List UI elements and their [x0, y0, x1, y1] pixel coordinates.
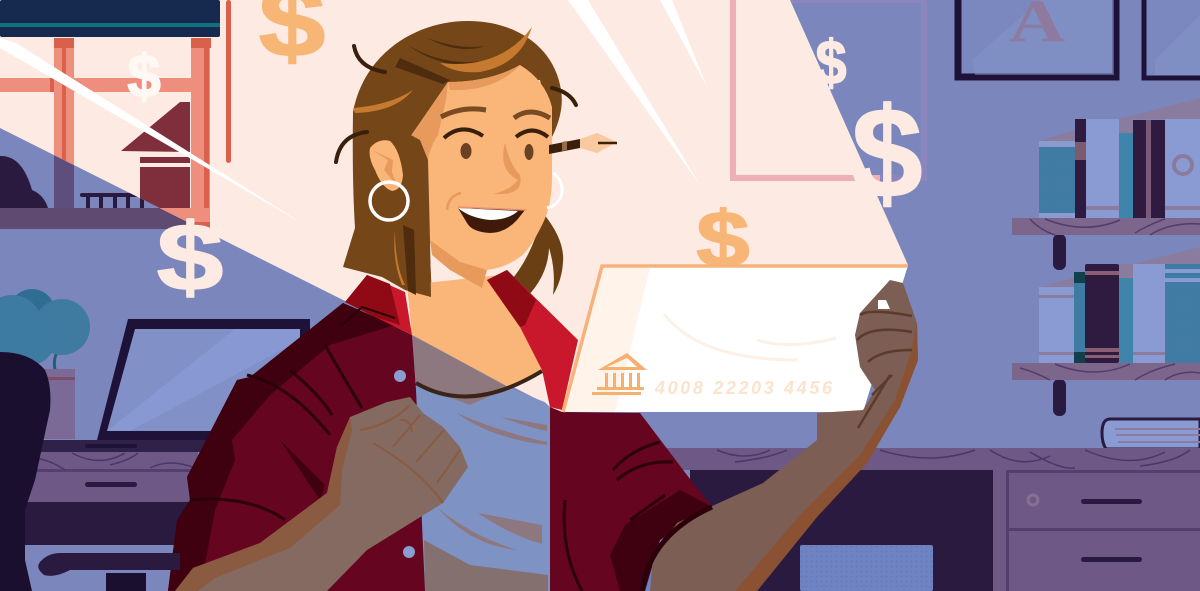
dollar signs: $: [127, 43, 161, 110]
face: [408, 65, 552, 270]
ear: [370, 140, 403, 191]
account number: 4008 22203 4456: [654, 378, 833, 398]
front hair: [400, 132, 431, 297]
person: [168, 21, 712, 591]
stray hairs: [336, 46, 576, 162]
pen behind the ear: [549, 133, 617, 154]
picture frame with letter A: [958, 0, 1116, 77]
right desk: [598, 448, 1200, 591]
window in shadow: [0, 38, 210, 229]
dollar signs: $: [157, 204, 223, 311]
inner ear: [372, 150, 397, 186]
white light streaks: [0, 0, 707, 222]
dollar signs: $: [851, 82, 923, 225]
pupils: [460, 143, 534, 160]
eyebrows: [441, 109, 550, 118]
hair behind the head: [500, 213, 563, 297]
dollar signs: [127, 0, 923, 311]
window in the light: [0, 38, 211, 229]
neck and chest: [407, 275, 544, 388]
shirt: [412, 335, 563, 591]
beam of light from the check: [0, 0, 908, 412]
book lying on the desk: [1102, 419, 1200, 449]
upper bookshelf with books: [1012, 98, 1200, 270]
large pink picture frame: [733, 0, 924, 178]
open smile: [447, 193, 526, 233]
lower bookshelf with books: [1012, 247, 1200, 416]
office chair: [0, 352, 180, 591]
laptop: [97, 319, 310, 440]
far earring: [547, 173, 562, 208]
nose: [493, 143, 521, 194]
main hair: [343, 21, 562, 297]
bank icon: [592, 353, 647, 395]
hoop earring: [370, 182, 408, 220]
second picture frame: [1144, 0, 1200, 78]
jacket left panel: [168, 275, 425, 591]
hand and arm holding the check: [642, 280, 918, 591]
hairline fringe: [395, 38, 522, 84]
hand and arm: raised fist: [175, 397, 468, 591]
dollar signs: $: [815, 29, 847, 98]
jacket right panel: [487, 270, 712, 591]
window blind: [0, 0, 220, 37]
face shading: [408, 65, 520, 288]
left desk: [20, 440, 220, 545]
closed eyelids: [444, 129, 548, 138]
orange hair highlights: [353, 27, 532, 285]
dark hair strip: [403, 225, 416, 295]
check: [562, 265, 908, 412]
dollar signs: $: [696, 195, 750, 284]
plant: [0, 289, 90, 439]
red wall edge line: [226, 0, 231, 163]
